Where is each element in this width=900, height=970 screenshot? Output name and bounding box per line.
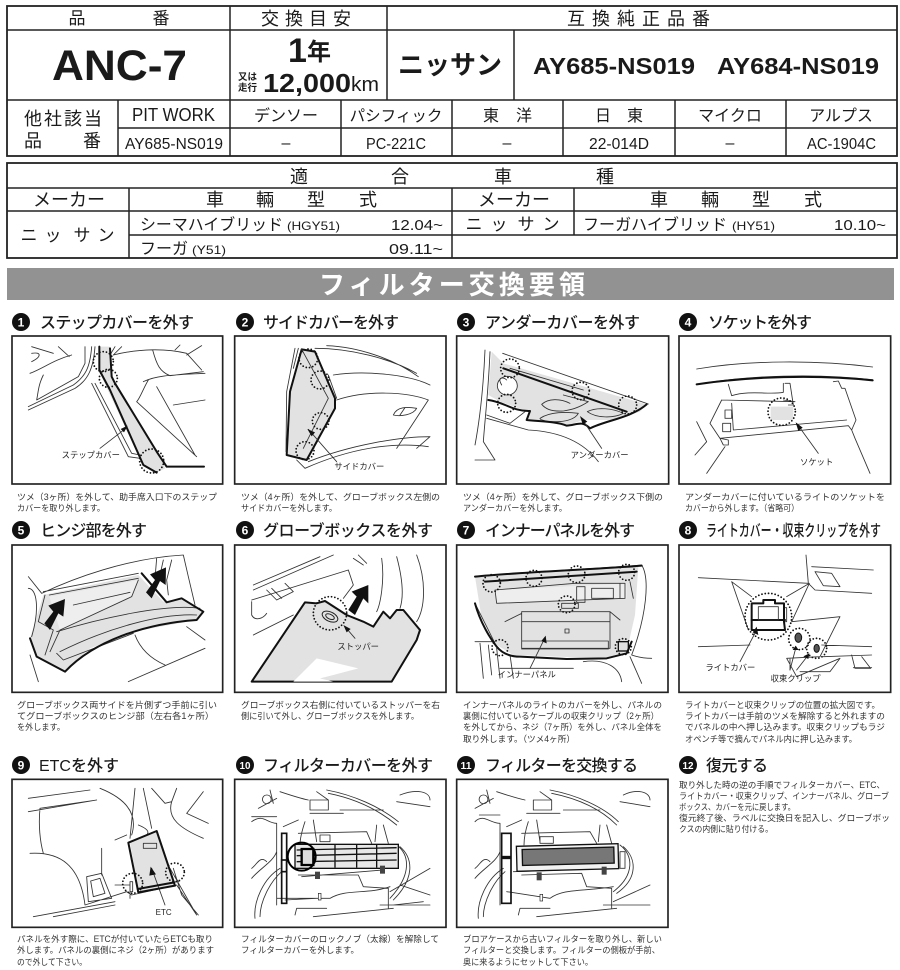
panel: step 9 xyxy=(12,756,223,967)
illustration: step cover: ステップカバー xyxy=(62,450,120,460)
panel: step 7 xyxy=(457,521,668,744)
genuine part numbers: AY685-NS019 xyxy=(533,53,695,79)
other brands part numbers: PC-221C xyxy=(366,136,426,153)
caption: step 3 xyxy=(463,491,663,513)
other brands label: 他社該当 xyxy=(24,109,102,129)
caption: step 7: 取り外します。（ツメ4ヶ所） xyxy=(463,733,575,744)
heading: step 10: フィルターカバーを外す xyxy=(263,757,433,775)
other brands label: 品番 xyxy=(24,131,101,151)
heading: step 5: 5 xyxy=(18,524,25,538)
caption: step 2: ツメ（4ヶ所）を外して、グローブボックス左側の xyxy=(241,491,440,502)
panel: step 2 xyxy=(235,313,446,513)
heading: step 7: 7 xyxy=(463,524,470,538)
heading: step 11: フィルターを交換する xyxy=(485,757,638,775)
caption: step 2: サイドカバーを外します。 xyxy=(241,502,337,513)
illustration: filter cover xyxy=(235,779,446,927)
panel: step 6 xyxy=(235,521,446,721)
heading: step 9: ETCを外す xyxy=(39,757,119,775)
caption: step 10 xyxy=(241,933,439,955)
vehicle rows: (Y51) xyxy=(192,243,226,257)
interval: 12,000 km: 又は xyxy=(238,72,258,83)
heading: step 10: 10 xyxy=(240,761,251,772)
heading: step 1: ステップカバーを外す xyxy=(40,314,194,332)
heading: step 3: アンダーカバーを外す xyxy=(485,313,640,332)
heading: step 9 xyxy=(12,756,119,775)
vehicle rows: (HY51) xyxy=(732,219,775,233)
illustration: light cover and clips: 収束クリップ xyxy=(771,674,821,684)
illustration: ETC: ETC xyxy=(156,908,172,917)
other brands label xyxy=(24,109,102,151)
caption: step 12: ボックス、カバーを元に戻します。 xyxy=(679,802,795,812)
header: compatible genuine part numbers: 互換純正品番 xyxy=(567,9,717,29)
interval: one year: 1 xyxy=(288,32,307,70)
caption: step 5: グローブボックス両サイドを片側ずつ手前に引い xyxy=(17,699,217,710)
illustration: light cover and clips xyxy=(679,545,891,692)
panel: step 4 xyxy=(679,313,891,513)
caption: step 7: を外してから、ネジ（7ヶ所）を外し、パネル全体を xyxy=(463,721,662,732)
interval: 12,000 km xyxy=(238,68,379,98)
caption: step 6: グローブボックス右側に付いているストッパーを右 xyxy=(241,699,440,710)
caption: step 8: でパネルの中へ押し込みます。収束クリップもラジ xyxy=(685,721,885,732)
caption: step 6 xyxy=(241,699,440,721)
other brands names: 東洋 xyxy=(483,107,532,125)
other brands part numbers: – xyxy=(726,135,735,152)
caption: step 12: クスの内側に貼り付ける。 xyxy=(679,823,773,834)
column headers xyxy=(33,190,822,210)
illustration: socket: ソケット xyxy=(800,457,833,467)
caption: step 9: パネルを外す際に、ETCが付いていたらETCも取り xyxy=(17,933,213,944)
heading: step 12: 復元する xyxy=(706,757,768,775)
interval: 12,000 km: km xyxy=(351,74,379,96)
vehicle rows: 09.11~ xyxy=(389,241,443,258)
caption: step 12 xyxy=(679,779,890,834)
heading: step 4: 4 xyxy=(685,316,692,330)
heading: step 1: 1 xyxy=(18,316,25,330)
illustration: step cover xyxy=(12,336,223,484)
caption: step 9: ので外して下さい。 xyxy=(17,956,87,967)
illustration: under cover xyxy=(457,336,669,484)
heading: step 12: 12 xyxy=(682,761,694,772)
other brands names: アルプス xyxy=(809,107,873,125)
panel: step 11 xyxy=(457,756,668,967)
illustration: glove box xyxy=(235,545,446,692)
interval: one year xyxy=(288,32,331,70)
panel: step 5 xyxy=(12,521,223,732)
other brands names: パシフィック xyxy=(350,107,442,125)
other brands part numbers: – xyxy=(282,135,291,152)
vehicle rows: 12.04~ xyxy=(391,217,443,234)
illustration: light cover and clips: ライトカバー xyxy=(705,663,755,673)
heading: step 2: サイドカバーを外す xyxy=(263,314,399,332)
section banner: filter replacement procedure xyxy=(7,268,894,300)
caption: step 11 xyxy=(463,933,662,967)
column headers: 車輛型式 xyxy=(650,190,822,210)
caption: step 8: ライトカバーと収束クリップの位置の拡大図です。 xyxy=(685,699,880,710)
other brands names xyxy=(132,105,873,125)
other brands part numbers xyxy=(125,135,876,153)
vehicle rows: (HGY51) xyxy=(287,219,340,233)
panel: step 1 xyxy=(12,313,223,513)
table: product information xyxy=(7,6,897,156)
caption: step 11: フィルターと交換します。フィルターの側板が手前、 xyxy=(463,944,660,955)
table: compatible vehicles xyxy=(7,163,897,258)
other brands names: PIT WORK xyxy=(132,105,215,125)
heading: step 4 xyxy=(679,313,812,332)
vehicle rows: フーガ xyxy=(140,240,188,258)
panel: step 8 xyxy=(679,521,891,744)
illustration: replacement filter xyxy=(457,779,668,927)
vehicle rows xyxy=(20,215,886,258)
caption: step 1: カバーを取り外します。 xyxy=(17,502,105,513)
caption: step 5: を外します。 xyxy=(17,721,65,732)
illustration: side cover xyxy=(235,336,446,484)
vehicle rows: シーマハイブリッド xyxy=(140,215,283,234)
illustration: under cover: アンダーカバー xyxy=(571,450,629,460)
heading: step 2: 2 xyxy=(242,316,249,330)
caption: step 7: インナーパネルのライトのカバーを外し、パネルの xyxy=(463,699,662,710)
interval: 12,000 km: 走行 xyxy=(238,82,258,94)
caption: step 9: 外します。パネルの裏側にネジ（2ヶ所）があります xyxy=(17,944,214,955)
vehicle rows: ニッサン xyxy=(466,215,560,234)
vehicle rows: ニッサン xyxy=(20,226,114,245)
caption: step 10: フィルターカバーを外します。 xyxy=(241,944,359,955)
caption: step 7: 裏側に付いているケーブルの収束クリップ（2ヶ所） xyxy=(463,710,659,721)
caption: step 2 xyxy=(241,491,440,513)
panel: step 12 xyxy=(679,756,890,834)
illustration: inner panel xyxy=(457,545,668,692)
column headers: メーカー xyxy=(33,190,105,210)
vehicle rows: フーガハイブリッド xyxy=(583,215,727,234)
vehicle rows: 10.10~ xyxy=(834,217,886,234)
heading: step 6: 6 xyxy=(242,524,249,538)
illustration: side cover: サイドカバー xyxy=(334,462,384,472)
caption: step 5 xyxy=(17,699,217,732)
caption: step 12: 取り外した時の逆の手順でフィルターカバー、ETC、 xyxy=(679,779,885,790)
caption: step 5: てグローブボックスのヒンジ部（左右各1ヶ所） xyxy=(17,710,214,721)
interval: 12,000 km: 12,000 xyxy=(263,68,351,98)
heading: step 5: ヒンジ部を外す xyxy=(40,522,147,540)
heading: step 4: ソケットを外す xyxy=(708,314,812,332)
column headers: 車輛型式 xyxy=(206,190,377,210)
illustration: inner panel: インナーパネル xyxy=(498,670,556,680)
other brands part numbers: AY685-NS019 xyxy=(125,136,223,153)
heading: step 6: グローブボックスを外す xyxy=(263,521,433,540)
table title: 適合車種 xyxy=(290,167,614,187)
illustration: ETC xyxy=(12,779,223,927)
interval: one year: 年 xyxy=(307,39,331,66)
caption: step 3: アンダーカバーを外します。 xyxy=(463,502,567,513)
heading: step 9: 9 xyxy=(18,758,25,772)
heading: step 8: 8 xyxy=(685,524,692,538)
panel: step 10 xyxy=(235,756,446,955)
section banner: filter replacement procedure: フィルター交換要領 xyxy=(319,270,585,300)
caption: step 3: ツメ（4ヶ所）を外して、グローブボックス下側の xyxy=(463,491,663,502)
heading: step 12 xyxy=(679,756,768,775)
illustration: glove box: ストッパー xyxy=(337,641,379,651)
caption: step 12: 復元終了後、ラベルに交換日を記入し、グローブボッ xyxy=(679,812,890,823)
other brands names: 日東 xyxy=(595,107,643,125)
other brands part numbers: AC-1904C xyxy=(807,136,876,153)
heading: step 3: 3 xyxy=(463,316,470,330)
other brands part numbers: – xyxy=(503,135,512,152)
caption: step 1 xyxy=(17,491,217,513)
other brands names: デンソー xyxy=(254,106,318,125)
caption: step 9 xyxy=(17,933,214,967)
other brands names: マイクロ xyxy=(698,107,762,125)
genuine part numbers: AY684-NS019 xyxy=(717,53,879,79)
genuine part numbers xyxy=(533,53,879,79)
illustration: socket xyxy=(679,336,891,484)
caption: step 10: フィルターカバーのロックノブ（太線）を解除して xyxy=(241,933,439,944)
caption: step 6: 側に引いて外し、グローブボックスを外します。 xyxy=(241,710,419,721)
illustration: hinge xyxy=(12,545,223,692)
product number value: ANC-7 xyxy=(52,42,187,90)
header: replacement interval: 交換目安 xyxy=(261,9,357,29)
caption: step 1: ツメ（3ヶ所）を外して、助手席入口下のステップ xyxy=(17,491,217,502)
manufacturer: ニッサン xyxy=(398,50,502,80)
caption: step 4: アンダーカバーに付いているライトのソケットを xyxy=(685,491,885,502)
caption: step 4 xyxy=(685,491,885,513)
column headers: メーカー xyxy=(478,190,550,210)
caption: step 4: カバーから外します。（省略可） xyxy=(685,502,799,513)
panel: step 3 xyxy=(457,313,669,513)
other brands part numbers: 22-014D xyxy=(589,136,649,153)
caption: step 8: ライトカバーは手前のツメを解除すると外れますの xyxy=(685,710,885,721)
caption: step 11: ブロアケースから古いフィルターを取り外し、新しい xyxy=(463,933,662,944)
caption: step 8: オペンチ等で摘んでパネル内に押し込みます。 xyxy=(685,733,857,744)
header: product number: 品番 xyxy=(68,9,170,28)
caption: step 8 xyxy=(685,699,885,744)
heading: step 11: 11 xyxy=(460,761,472,772)
caption: step 11: 奥に来るようにセットして下さい。 xyxy=(463,956,593,967)
caption: step 7 xyxy=(463,699,662,744)
heading: step 7: インナーパネルを外す xyxy=(485,522,635,540)
